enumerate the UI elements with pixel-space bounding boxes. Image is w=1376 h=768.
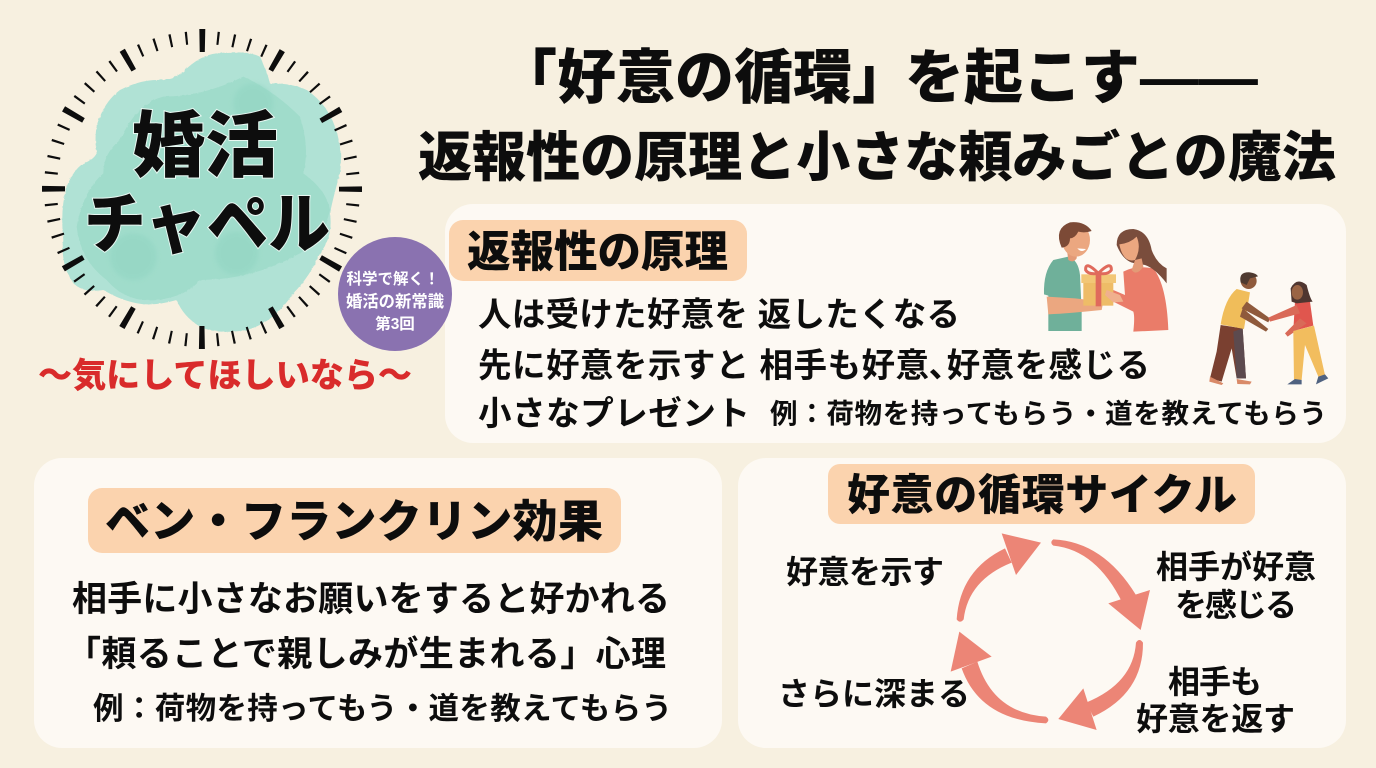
label: 相手が好意を感じる: を感じる (1175, 587, 1297, 623)
badge line 1: 科学で解く！ (346, 269, 440, 288)
watercolor blob (62, 52, 341, 332)
logo text: 婚活: 婚活 (132, 107, 278, 187)
cycle arrows (951, 533, 1150, 730)
badge: 第3回 (338, 237, 452, 351)
illustration: two people reaching out (1209, 272, 1328, 385)
body line 3: 小さなプレゼント (478, 396, 750, 433)
panel: ベン・フランクリン効果 (34, 458, 722, 748)
heading pill: 返報性の原理 (467, 229, 728, 277)
title line 2: 返報性の原理と小さな頼みごとの魔法 (418, 127, 1336, 188)
label: 相手が好意を感じる (1156, 549, 1316, 623)
logo: clock with watercolor blob (50, 38, 354, 340)
heading pill: 好意の循環サイクル (847, 472, 1237, 520)
label: 相手が好意を感じる: 相手が好意 (1156, 549, 1316, 585)
logo text: チャペル: チャペル (84, 187, 330, 261)
label: 相手も好意を返す: 好意を返す (1136, 701, 1295, 737)
arrow: bottom right (1058, 640, 1143, 730)
badge line 2: 婚活の新常識 (346, 292, 445, 311)
clock ticks (50, 38, 354, 340)
title (418, 45, 1336, 188)
label: 相手も好意を返す (1136, 664, 1295, 737)
title line 1: を起こす—— (905, 45, 1258, 111)
body line 3: 例：荷物を持ってもう・道を教えてもらう (93, 692, 672, 726)
body line 2: 「頼ることで親しみが生まれる」心理 (66, 635, 666, 674)
badge line 3: 第3回 (375, 314, 415, 333)
label: 好意を示す: 好意を示す (786, 554, 944, 590)
body line 1: 人は受けた好意を 返したくなる (478, 297, 960, 334)
body line 1: 相手に小さなお願いをすると好かれる (72, 580, 670, 619)
title line 1: 「好意の循環」 (498, 45, 911, 111)
panel: 好意の循環サイクル (738, 458, 1346, 748)
arrow: top left (957, 533, 1041, 622)
arrow: top right (1051, 539, 1150, 630)
panel: 返報性の原理 (445, 204, 1346, 443)
example text: 例：荷物を持ってもらう・道を教えてもらう (770, 398, 1327, 429)
illustration: couple with gift (1044, 222, 1168, 332)
arrow: bottom left (951, 632, 1048, 723)
heading pill (449, 220, 747, 281)
subtitle: ～気にしてほしいなら～ (38, 357, 412, 395)
label: 相手も好意を返す: 相手も (1168, 664, 1262, 700)
heading pill: ベン・フランクリン効果 (105, 496, 603, 547)
body line 2: 先に好意を示すと 相手も好意､好意を感じる (478, 348, 1150, 385)
label: さらに深まる: さらに深まる (778, 676, 970, 712)
